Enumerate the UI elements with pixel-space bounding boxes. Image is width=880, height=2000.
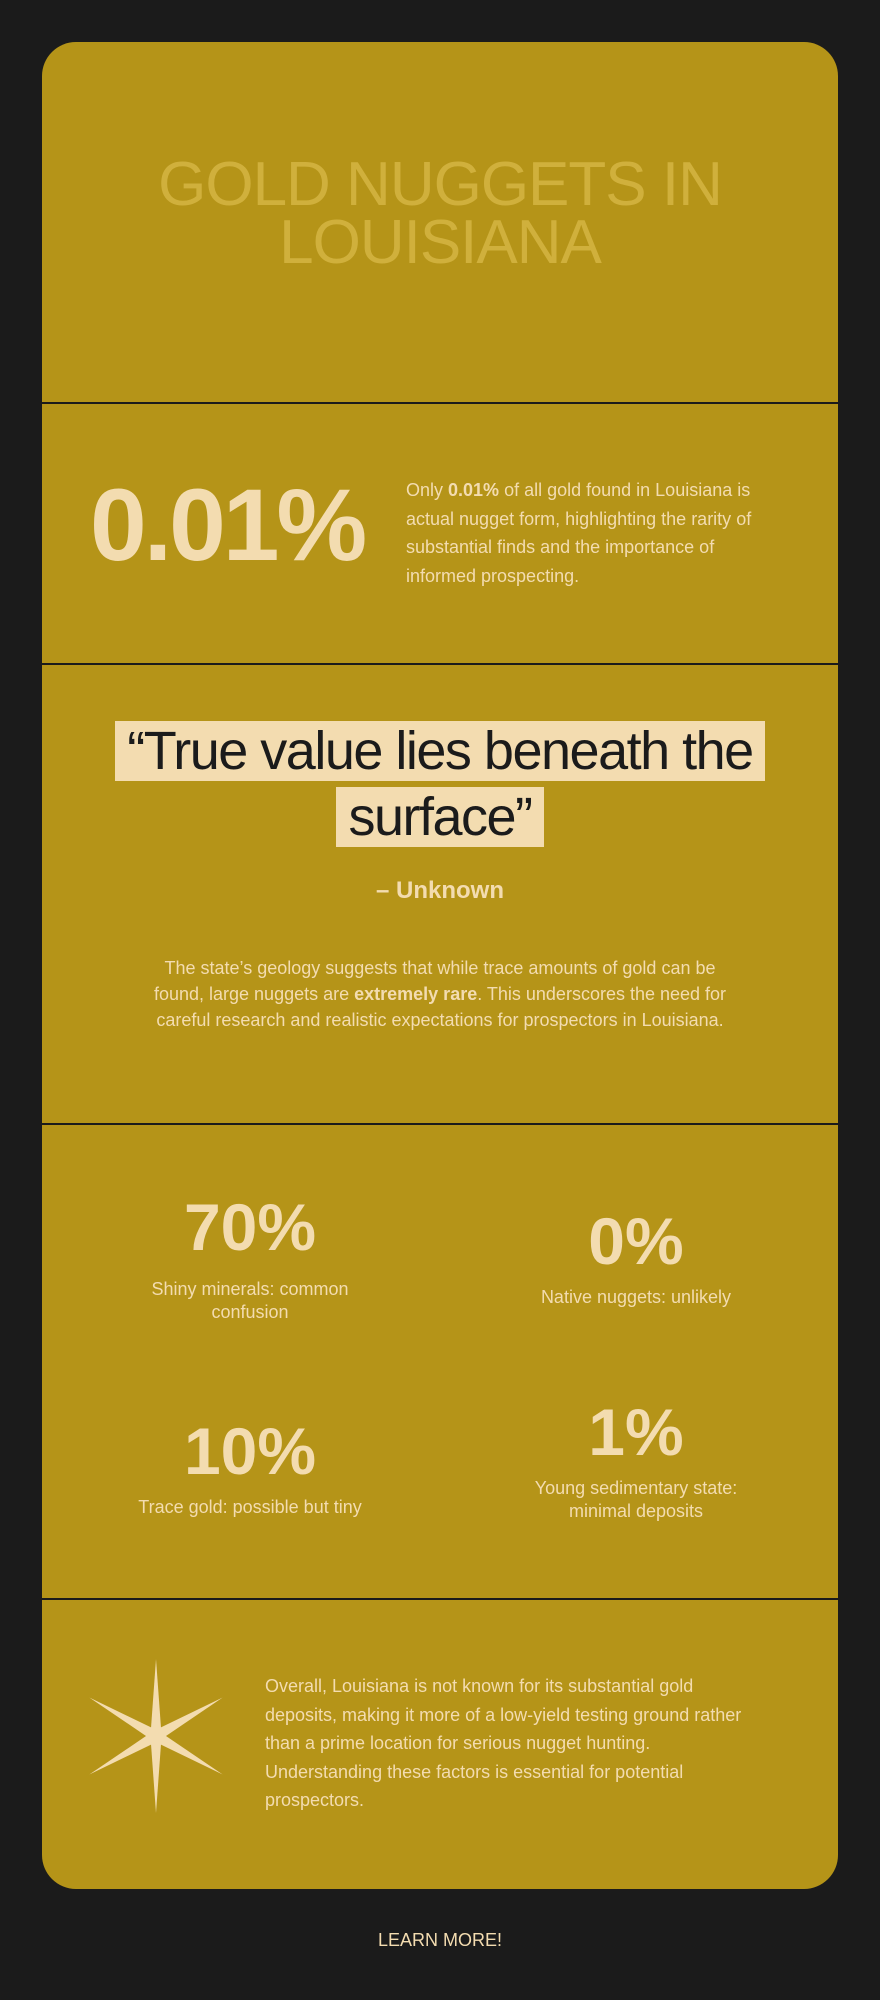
stat 70%: Shiny minerals: common bbox=[151, 1279, 349, 1299]
stat description: Only 0.01% of all gold found in Louisiana is actual nugget form, highlighting the rarity of substantial finds and the importance of informed prospecting. bbox=[406, 480, 751, 586]
title bbox=[158, 150, 722, 277]
stat 1%: Young sedimentary state: bbox=[535, 1478, 737, 1498]
stat 70%: 70% bbox=[184, 1190, 316, 1264]
quote bbox=[115, 721, 765, 847]
quote: surface” bbox=[348, 787, 532, 847]
paragraph: The state’s geology suggests that while trace amounts of gold can be found, large nuggets are extremely rare. This underscores the need for careful research and realistic expectations for prospectors in Louisiana. bbox=[154, 958, 726, 1030]
stat 10% bbox=[138, 1414, 362, 1517]
stat 0% bbox=[541, 1204, 731, 1307]
quote author: – Unknown bbox=[376, 877, 504, 904]
title: GOLD NUGGETS IN bbox=[158, 150, 722, 219]
learn more link: LEARN MORE! bbox=[378, 1930, 502, 1950]
title: LOUISIANA bbox=[279, 208, 601, 277]
stat 1%: 1% bbox=[588, 1395, 684, 1469]
stat 10%: Trace gold: possible but tiny bbox=[138, 1497, 362, 1517]
big stat 0.01%: 0.01% bbox=[90, 468, 364, 582]
stat 0%: 0% bbox=[588, 1204, 684, 1278]
stat 70% bbox=[151, 1190, 349, 1322]
stat 10%: 10% bbox=[184, 1414, 316, 1488]
conclusion text: Overall, Louisiana is not known for its substantial gold deposits, making it more of a low-yield testing ground rather than a prime location for serious nugget hunting. Understanding these factors is essential for potential prospectors. bbox=[265, 1676, 741, 1810]
stat 70%: confusion bbox=[211, 1302, 289, 1322]
stat 1%: minimal deposits bbox=[569, 1501, 703, 1521]
icon: star bbox=[90, 1660, 222, 1812]
stat 1% bbox=[535, 1395, 737, 1521]
stat 0%: Native nuggets: unlikely bbox=[541, 1287, 731, 1307]
quote: “True value lies beneath the bbox=[127, 721, 753, 781]
